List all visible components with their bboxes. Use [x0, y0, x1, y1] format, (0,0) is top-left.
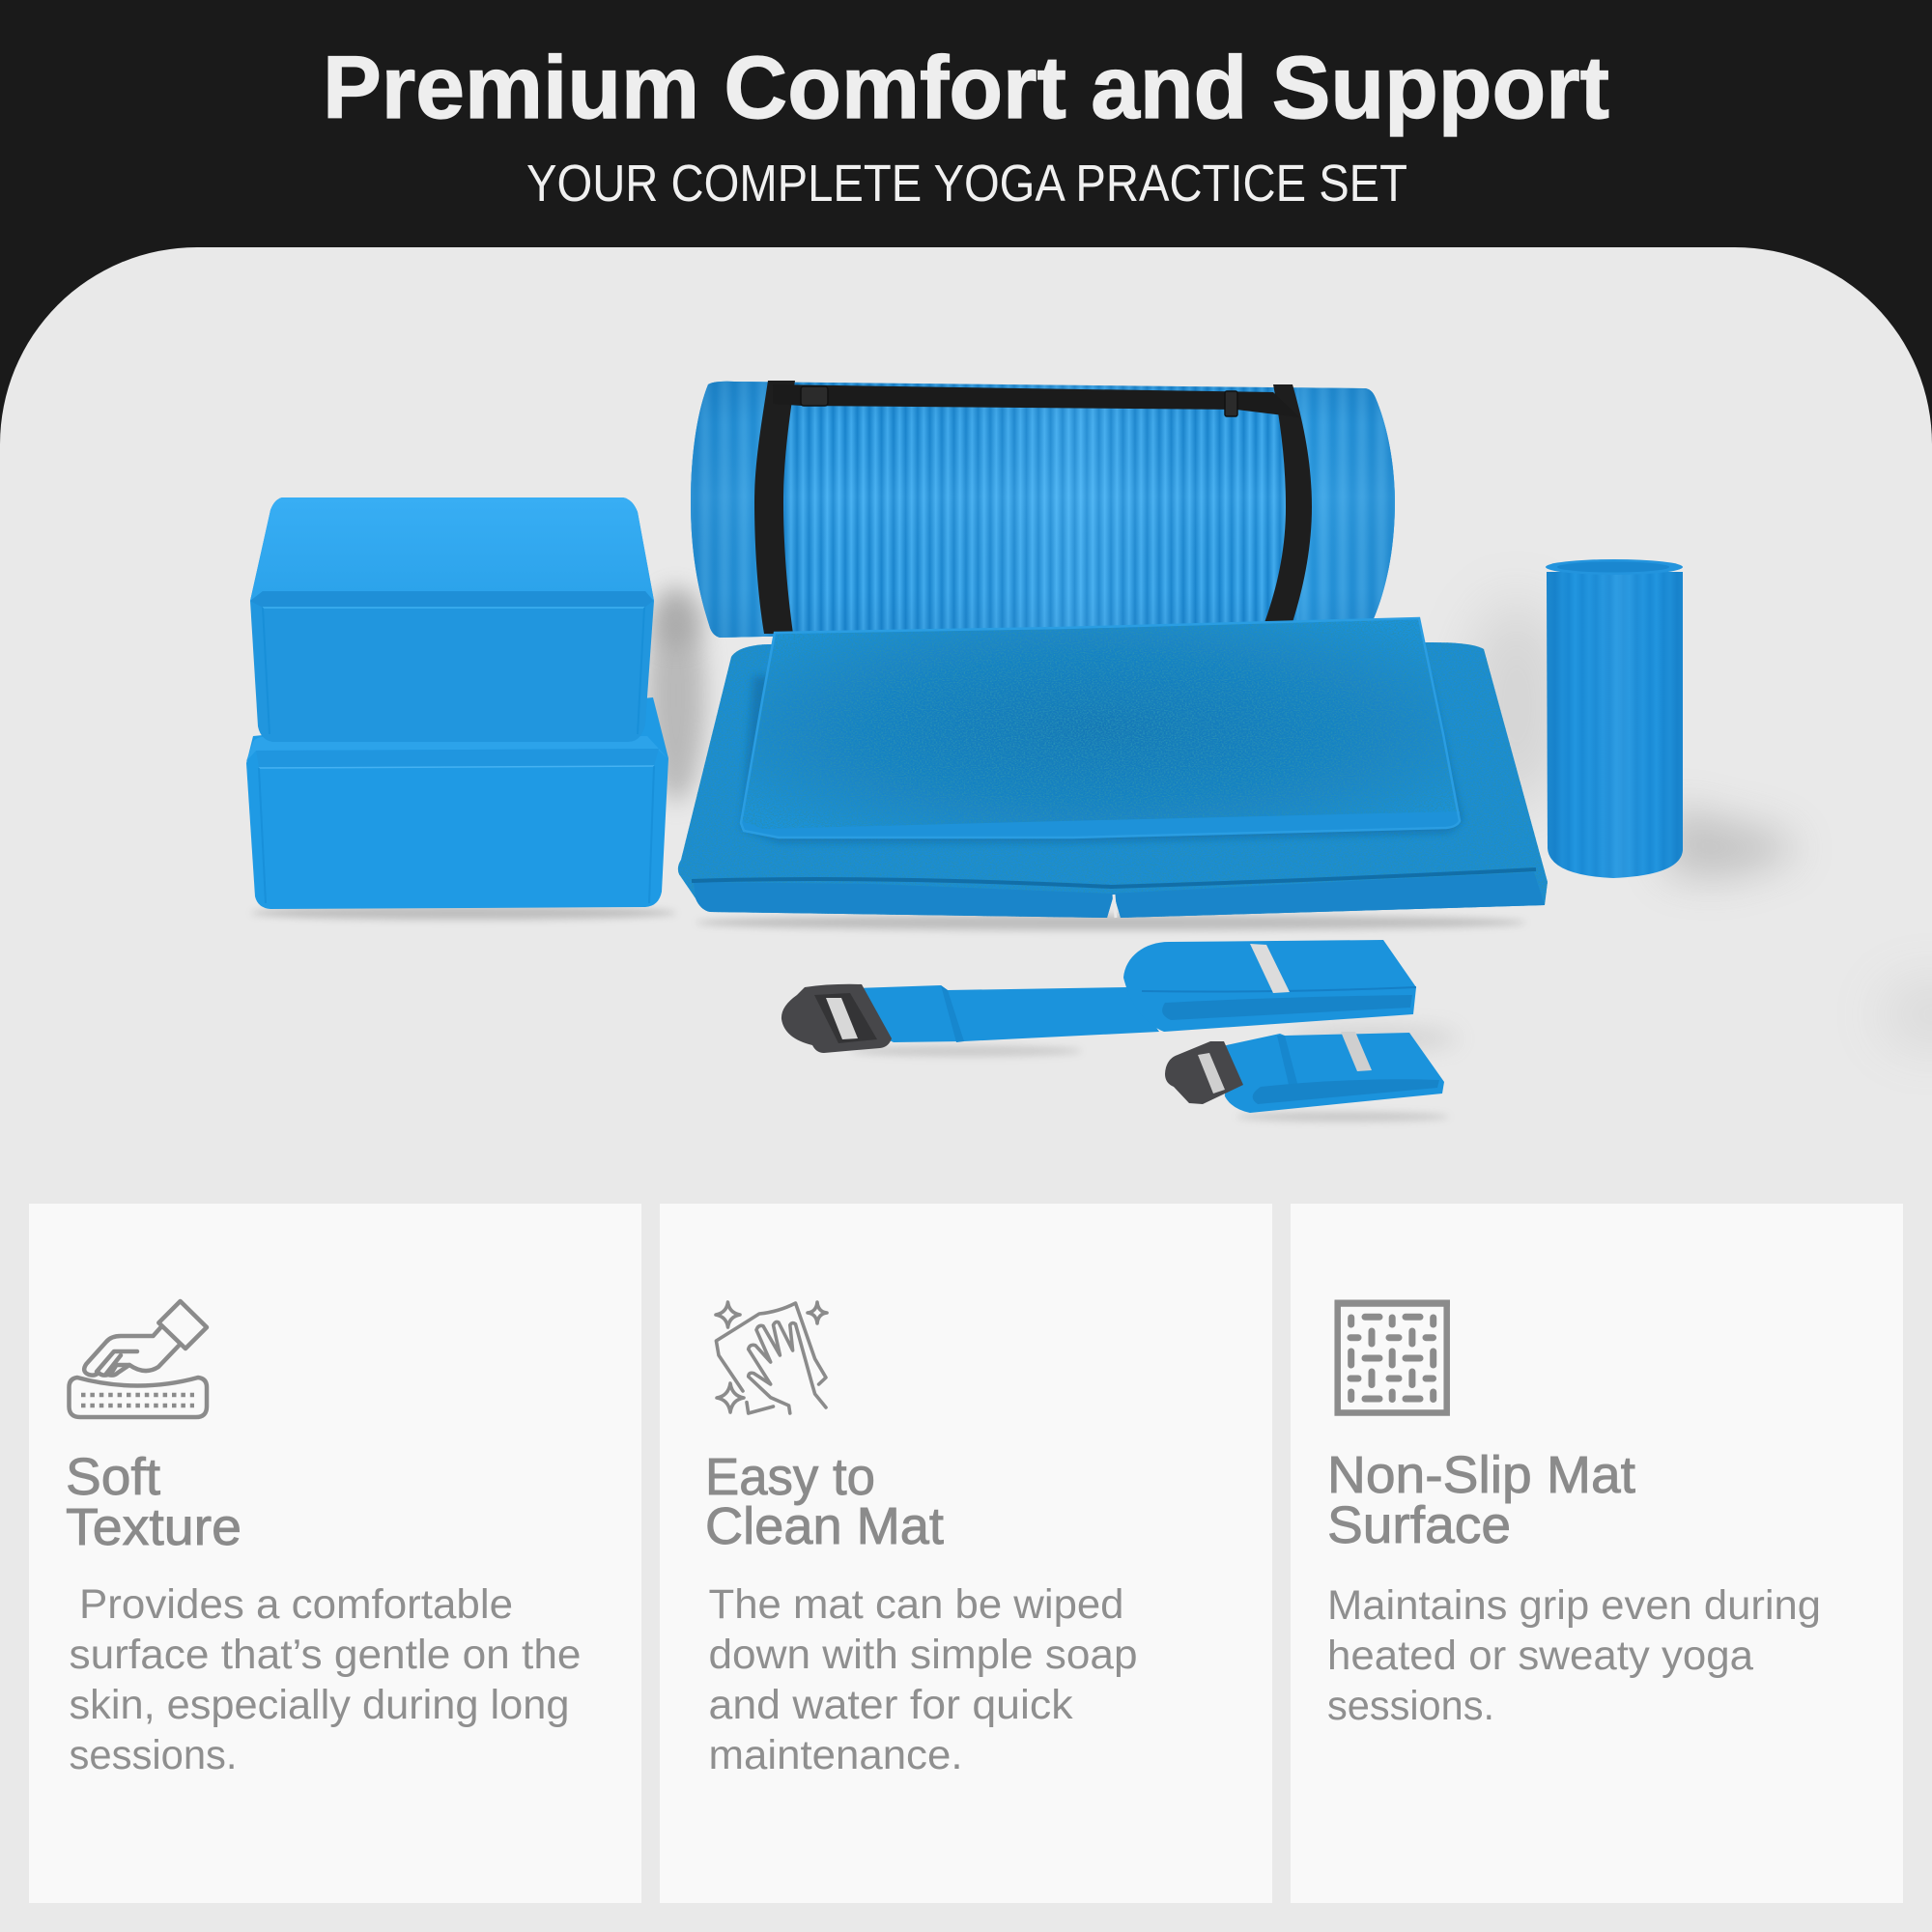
body text: The mat can be wiped [709, 1581, 1124, 1628]
mat strap: top band [773, 384, 1299, 417]
body text: maintenance. [709, 1732, 962, 1778]
soft floor shadows [251, 589, 1932, 1122]
yoga strap: short [1165, 1032, 1444, 1113]
title: Premium Comfort and Support [323, 39, 1609, 137]
body text: and water for quick [709, 1682, 1073, 1728]
panel: soft texture [29, 1204, 641, 1903]
icon: hand pressing cushion [70, 1301, 207, 1417]
heading: Easy to [705, 1448, 875, 1506]
mat strap: right band [1263, 384, 1312, 628]
heading [66, 1448, 242, 1556]
heading: Texture [66, 1498, 242, 1556]
body text: Maintains grip even during [1327, 1582, 1821, 1629]
body text: Provides a comfortable [79, 1581, 513, 1628]
product photo: yoga set [246, 377, 1932, 1122]
subtitle: YOUR COMPLETE YOGA PRACTICE SET [526, 155, 1407, 213]
yoga block: top [250, 497, 654, 742]
heading: Clean Mat [705, 1497, 944, 1555]
body text [709, 1581, 1138, 1778]
heading [705, 1448, 944, 1555]
foam roller [1546, 559, 1683, 878]
heading: Soft [66, 1448, 160, 1506]
body text: skin, especially during long [70, 1682, 570, 1728]
body text: sessions. [1327, 1683, 1494, 1729]
icon: non-slip pattern [1335, 1303, 1450, 1412]
panel: non-slip surface [1291, 1204, 1903, 1903]
heading: Surface [1327, 1496, 1511, 1554]
body text: heated or sweaty yoga [1327, 1633, 1753, 1679]
header band [0, 0, 1932, 502]
mat strap: left band [754, 381, 795, 634]
yoga block: bottom [246, 697, 668, 909]
small towel shadow [742, 676, 1463, 842]
body text: down with simple soap [709, 1632, 1138, 1678]
icon: hand wiping with cloth [716, 1302, 827, 1413]
mat strap: buckles [801, 386, 1237, 416]
rolled yoga mat [681, 377, 1401, 642]
large folded towel [678, 642, 1548, 918]
yoga strap: long [781, 940, 1416, 1053]
heading [1327, 1446, 1635, 1554]
small folded towel [741, 618, 1460, 838]
heading: Non-Slip Mat [1327, 1446, 1635, 1504]
panel: easy to clean [660, 1204, 1272, 1903]
body text: surface that’s gentle on the [70, 1632, 581, 1678]
body text: sessions. [70, 1732, 238, 1778]
body text [1327, 1582, 1821, 1729]
body text [70, 1581, 581, 1778]
